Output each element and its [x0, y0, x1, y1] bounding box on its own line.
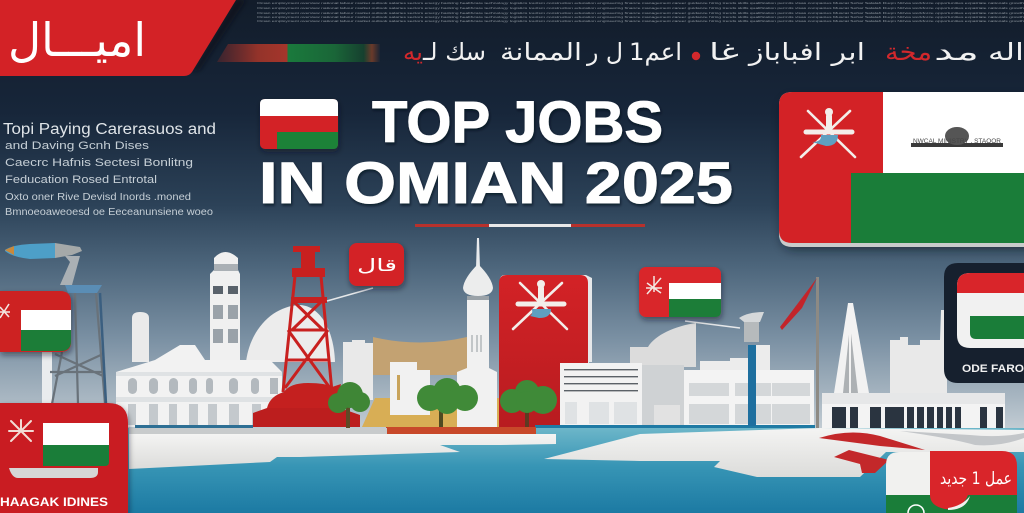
rig with blue deck: [42, 256, 106, 404]
Arabic headline strip: الممانة: [500, 38, 582, 66]
Arabic headline strip: اله: [988, 38, 1024, 66]
Arabic headline strip: يه: [403, 38, 423, 66]
card: bottom-right Arabic flag: [886, 451, 1017, 513]
fine print block at the top: Oman employment overview national labour market outlook salaries sectors energy banking healthcare technology logistics tourism construction education engineering finance management career guidance hiring trends skills qualification permits visas companies Muscat Sohar Salalah Duqm Nizwa workforce opportunities expatriate nationals growth: [257, 1, 1024, 5]
skyline: white palace: [116, 345, 282, 428]
skyline: great dome: [246, 305, 335, 362]
icon: emblem: [9, 420, 33, 441]
title: IN OMIAN 2025: [259, 151, 733, 216]
flag badge on the line: [639, 267, 721, 317]
icon: emblem: [513, 280, 567, 329]
skyline: curved building: [630, 323, 696, 367]
card: left flag: [0, 291, 71, 352]
shoreline: right land: [544, 428, 1024, 477]
fine print block at the top: Oman employment overview national labour market outlook salaries sectors energy banking healthcare technology logistics tourism construction education engineering finance management career guidance hiring trends skills qualification permits visas companies Muscat Sohar Salalah Duqm Nizwa workforce opportunities expatriate nationals growth: [257, 19, 1024, 23]
Arabic headline strip: اعم1: [629, 38, 682, 66]
fine print block at the top: Oman employment overview national labour market outlook salaries sectors energy banking healthcare technology logistics tourism construction education engineering finance management career guidance hiring trends skills qualification permits visas companies Muscat Sohar Salalah Duqm Nizwa workforce opportunities expatriate nationals growth: [257, 6, 1024, 10]
Arabic headline strip: [403, 38, 1024, 66]
flag caption: [911, 127, 1003, 147]
title: TOP JOBS: [372, 90, 663, 155]
skyline: chimney: [132, 312, 149, 362]
tree beside card: [500, 380, 557, 428]
left intro text block: Oxto oner Rive Devisd Inords .moned: [5, 192, 191, 203]
skyline: far-right buildings: [822, 303, 1005, 429]
aircraft-like beacon: [5, 243, 82, 259]
Arabic headline strip: سك لـ: [422, 38, 486, 66]
street lamp: [685, 312, 764, 426]
fine print block at the top: Oman employment overview national labour market outlook salaries sectors energy banking healthcare technology logistics tourism construction education engineering finance management career guidance hiring trends skills qualification permits visas companies Muscat Sohar Salalah Duqm Nizwa workforce opportunities expatriate nationals growth: [257, 15, 1024, 19]
title underline: [415, 224, 645, 227]
Arabic headline strip: مخة: [885, 38, 932, 66]
banner: top-left red Arabic tab: [0, 0, 246, 76]
red emblem tall card: [499, 275, 592, 427]
left intro text block: Feducation Rosed Entrotal: [5, 174, 157, 186]
card: bottom-right Arabic flag: عمل 1 جدید: [940, 469, 1012, 489]
orange waterfront strip: [386, 427, 536, 434]
Arabic headline strip: ابر افباباز: [748, 38, 865, 66]
fine print block at the top: Oman employment overview national labour market outlook salaries sectors energy banking healthcare technology logistics tourism construction education engineering finance management career guidance hiring trends skills qualification permits visas companies Muscat Sohar Salalah Duqm Nizwa workforce opportunities expatriate nationals growth: [257, 11, 1024, 15]
card: right dark flag: [944, 263, 1024, 383]
trees: [328, 378, 478, 428]
icon: khanjar emblem: [801, 108, 855, 157]
title: [259, 90, 733, 216]
Arabic headline strip: مد: [934, 38, 979, 66]
skyline: white lookout tower: [210, 252, 240, 362]
left intro text block: Bmnoeoaweoesd oe Eeceanunsiene woeo: [5, 207, 213, 218]
Arabic headline strip: ل ر: [586, 38, 623, 66]
connector: derrick to badge: [327, 288, 373, 301]
flag caption: NWCAL MINISTRY . STAOOR: [913, 139, 1002, 145]
silver plate: [9, 468, 98, 478]
left intro text block: Topi Paying Carerasuos and: [3, 121, 216, 138]
left intro text block: Caecrc Hafnis Sectesi Bonlitng: [5, 157, 193, 169]
card caption: ODE FARO: [962, 363, 1024, 375]
card: bottom-left flag: [0, 403, 128, 513]
left intro text block: and Daving Gcnh Dises: [5, 140, 150, 152]
fine print block at the top: [257, 1, 1024, 23]
skyline: minaret: [457, 238, 497, 427]
gradient red-green bar: [217, 44, 380, 62]
Arabic headline strip: غا: [709, 38, 739, 66]
card caption: HAAGAK IDINES: [0, 495, 108, 509]
banner: top-left red Arabic tab: امیـــال: [8, 13, 146, 67]
badge: red Arabic sign: [349, 243, 404, 286]
badge: red Arabic sign: قال: [357, 256, 397, 276]
icon: red oil derrick: [253, 246, 360, 427]
large Oman flag panel: [779, 92, 1024, 250]
skyline: right buildings: [535, 345, 815, 428]
left intro text block: [3, 121, 216, 218]
flag pole: [780, 277, 819, 429]
shoreline: left land: [129, 428, 556, 469]
title flag icon: [260, 99, 338, 149]
sea: [0, 428, 1024, 513]
skyline: background blocks left: [343, 337, 500, 427]
